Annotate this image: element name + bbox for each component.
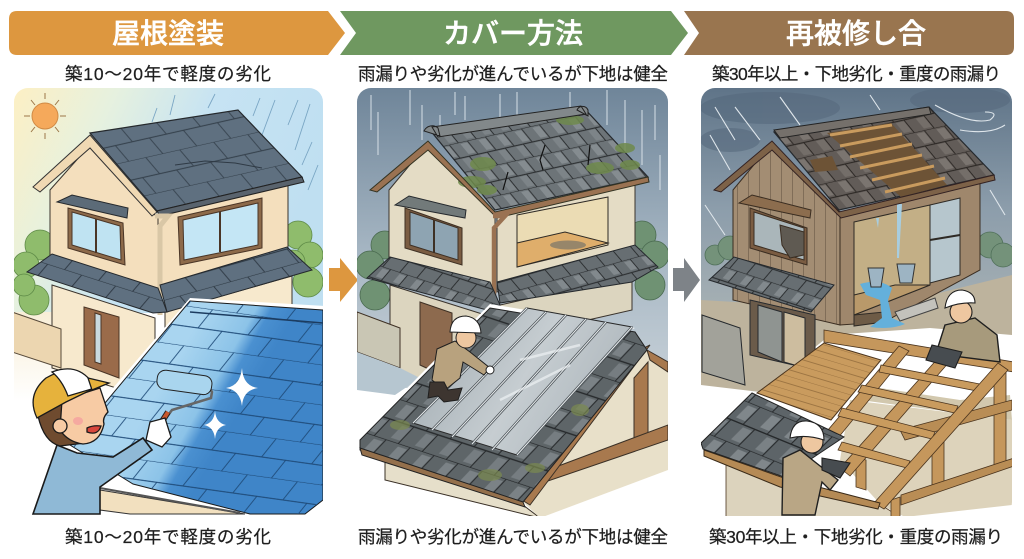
tiled roof foreground bbox=[356, 304, 647, 507]
roof bbox=[430, 107, 648, 210]
trees bbox=[356, 221, 669, 310]
roof sheathing planks bbox=[757, 343, 881, 420]
worker on metal roof bbox=[428, 316, 494, 402]
walls bbox=[388, 150, 636, 377]
panel: re-roofing illustration bbox=[700, 87, 1015, 520]
fascia bbox=[714, 141, 995, 218]
upper window bbox=[395, 196, 466, 265]
arrow: orange flow bbox=[329, 258, 358, 302]
downspout bbox=[155, 216, 168, 315]
subtitle: roof painting top: 築10〜20年で軽度の劣化 bbox=[65, 64, 271, 84]
main roof bbox=[90, 110, 302, 211]
broken window bbox=[739, 195, 811, 265]
exposed battens bbox=[810, 123, 947, 197]
tiles foreground bbox=[701, 393, 880, 509]
header arrow: 屋根塗装: 屋根塗装 bbox=[112, 18, 224, 49]
panel: roof painting illustration bbox=[12, 88, 325, 520]
panel: cover method illustration bbox=[356, 88, 669, 523]
wind and rain lines bbox=[705, 95, 1005, 235]
icon: sun bbox=[24, 93, 66, 139]
lower roofs bbox=[367, 257, 500, 310]
upper worker bbox=[926, 290, 1000, 368]
header arrow: 再被修し合 bbox=[684, 11, 1014, 55]
caption: roof painting bottom: 築10〜20年で軽度の劣化 bbox=[65, 527, 271, 547]
ground bbox=[701, 275, 1012, 392]
sparkles bbox=[204, 368, 258, 439]
fence bbox=[12, 312, 61, 368]
caption: re-roofing bottom: 築30年以上・下地劣化・重度の雨漏り bbox=[709, 527, 1003, 547]
ridge bbox=[774, 107, 931, 138]
lower wall and gable bbox=[385, 345, 668, 518]
caption: cover method bottom: 雨漏りや劣化が進んでいるが下地は健全 bbox=[358, 527, 668, 547]
wood walls bbox=[733, 143, 980, 325]
moss patches bbox=[458, 115, 640, 195]
paint roller bbox=[156, 369, 213, 423]
white rain bbox=[371, 90, 660, 200]
gable fascia bbox=[33, 135, 157, 216]
right upper window bbox=[178, 198, 262, 265]
water and buckets bbox=[860, 204, 938, 328]
metal cover panel bbox=[413, 308, 632, 455]
lower worker bbox=[782, 421, 850, 515]
storm clouds bbox=[700, 87, 1010, 152]
lower roof and door bbox=[702, 257, 834, 385]
header arrow: 屋根塗装 bbox=[9, 11, 345, 55]
header arrow: カバー方法: カバー方法 bbox=[443, 18, 583, 49]
painted blue roof bbox=[60, 298, 325, 515]
interior with leak bbox=[854, 198, 960, 326]
painter figure bbox=[33, 369, 171, 514]
entrance door bbox=[84, 307, 119, 378]
fascia bbox=[370, 141, 649, 218]
lower roofs bbox=[27, 254, 167, 313]
subtitle: re-roofing top: 築30年以上・下地劣化・重度の雨漏り bbox=[712, 64, 1001, 84]
arrow: grey flow bbox=[673, 258, 700, 302]
subtitle: cover method top: 雨漏りや劣化が進んでいるが下地は健全 bbox=[358, 64, 668, 84]
ridge bbox=[424, 106, 588, 137]
trees bbox=[705, 232, 1015, 267]
damaged roof bbox=[774, 107, 994, 210]
door and fence bbox=[357, 302, 452, 395]
trees bbox=[13, 221, 323, 315]
header arrow: 再被修し合: 再被修し合 bbox=[786, 18, 926, 49]
downspout bbox=[493, 216, 505, 320]
house walls bbox=[50, 145, 292, 400]
timber frame bbox=[726, 330, 1014, 518]
cutaway room bbox=[517, 197, 608, 267]
rain streaks bbox=[152, 94, 318, 190]
header arrow: カバー方法 bbox=[340, 11, 688, 55]
left upper window bbox=[57, 195, 128, 265]
roof cracks bbox=[503, 145, 590, 190]
